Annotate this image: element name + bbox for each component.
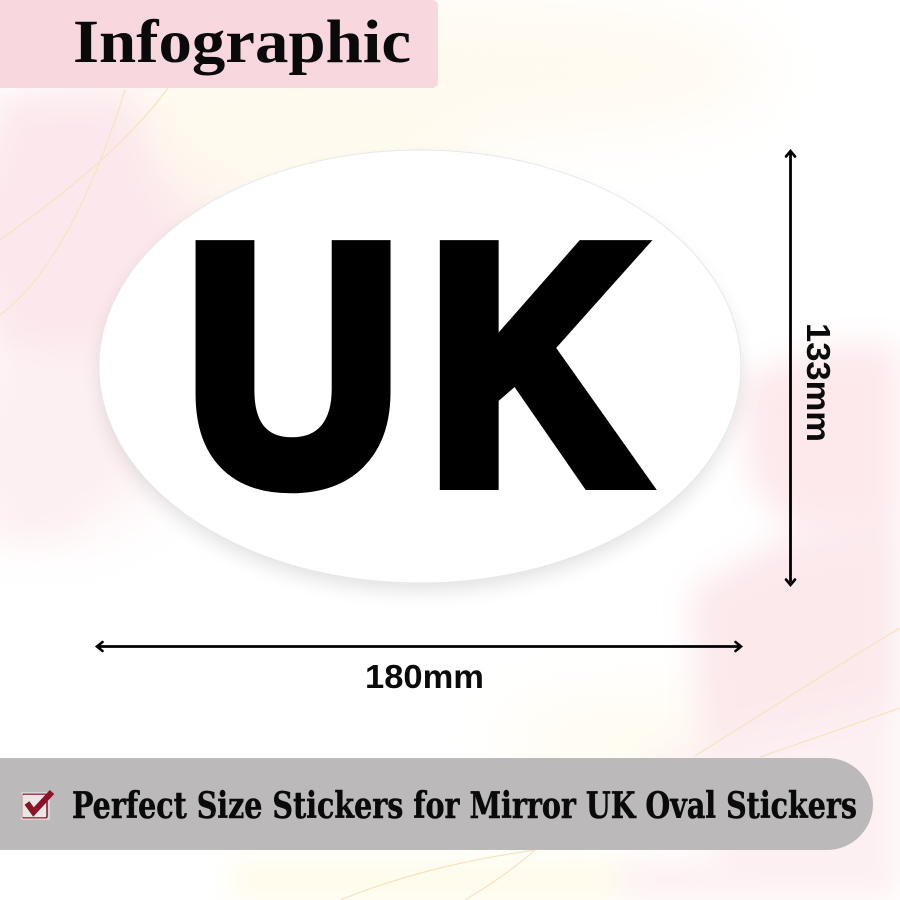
width label: 180mm bbox=[365, 658, 484, 695]
title banner bbox=[0, 0, 438, 88]
horizontal dimension arrow: 180mm bbox=[97, 642, 741, 695]
UK lettering: UK bbox=[186, 177, 643, 553]
vertical dimension arrow: 133mm bbox=[786, 151, 837, 585]
icon: checkbox with tick bbox=[22, 792, 52, 819]
bottom caption bar bbox=[0, 758, 873, 850]
height label: 133mm bbox=[800, 323, 837, 442]
title text: Infographic bbox=[73, 9, 411, 76]
